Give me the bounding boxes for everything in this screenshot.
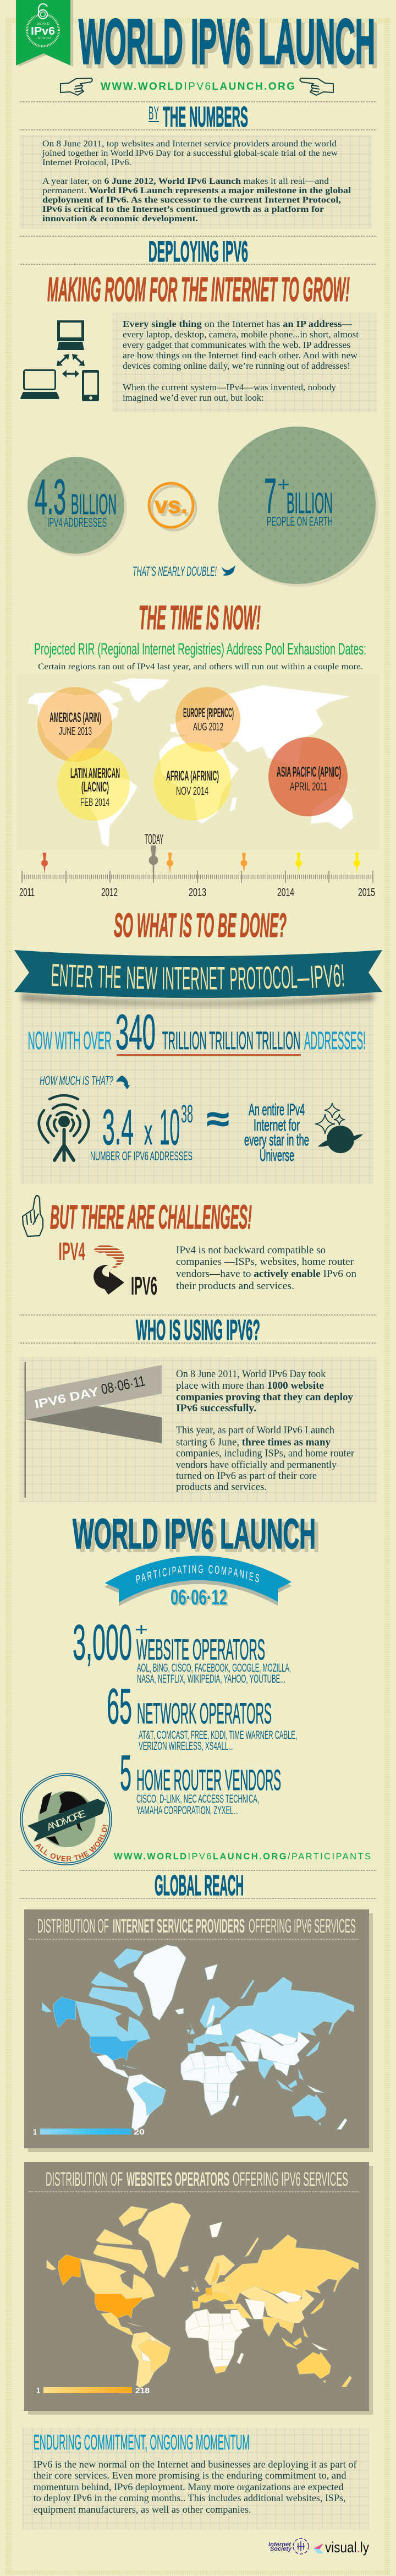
comparison text: Internet for	[254, 1116, 300, 1134]
logo: internet society	[268, 2539, 309, 2554]
comparison text: An entire IPv4	[249, 1101, 305, 1119]
ribbon logo: LAUNCH	[36, 37, 51, 40]
legend: isps: 20	[134, 2127, 145, 2137]
panel: every single thing: every laptop, desktop, camera, mobile phone...in short, almost	[123, 329, 359, 340]
stat: 3.4 x 10^38	[90, 1100, 193, 1163]
choropleth map: isps	[42, 1945, 354, 2130]
text: 2011 and 2012	[176, 1369, 354, 1493]
region: africa: NOV 2014	[176, 785, 208, 798]
panel: every single thing: imagined we’d ever run out, but look:	[123, 392, 264, 403]
region: americas: JUNE 2013	[59, 725, 92, 738]
icon: hand pointing up	[23, 1196, 43, 1236]
panel: intro text: deployment of IPv6. As the successor to the current Internet Protocol,	[42, 195, 341, 205]
panel: intro text: IPv6 is critical to the Internet’s continued growth as a platform for	[42, 205, 324, 214]
vs badge: vs.	[157, 495, 190, 521]
circle: 7 billion people	[218, 427, 378, 587]
badge: and more all over the world: ALL OVER THE WORLD!	[35, 1825, 108, 1862]
text: 2011 and 2012: place with more than 1000 website	[176, 1380, 324, 1391]
region: latin america: FEB 2014	[80, 797, 109, 809]
approximately equal sign: ≈	[207, 1100, 229, 1138]
circle: 4.3 billion ipv4 addresses	[28, 457, 127, 556]
legend: isps	[33, 2127, 145, 2137]
pin: april 2011	[41, 853, 48, 874]
panel: every single thing: devices coming online daily, we’re running out of addresses!	[123, 361, 350, 371]
stat: website operators: +	[135, 1619, 148, 1640]
circle: 7 billion people: PEOPLE ON EARTH	[267, 514, 333, 528]
timeline: 2015	[358, 886, 375, 899]
banner text: INTERNET	[162, 961, 225, 996]
vs badge: vs.	[155, 492, 188, 518]
ribbon: participating companies: PARTICIPATING COMPANIES	[136, 1565, 260, 1584]
icon: left pointing hand	[61, 78, 92, 95]
ribbon logo: IPv6	[31, 25, 55, 37]
pin: nov 2014	[354, 853, 360, 874]
headline: address count	[28, 1005, 366, 1060]
region: africa	[166, 768, 219, 798]
panel: enduring commitment: their core services. Even more promising is the enduring commitment to, and	[34, 2470, 346, 2481]
badge: and more all over the world	[20, 1773, 112, 1865]
text: backward compatibility: vendors—have to actively enable IPv6 on	[176, 1269, 356, 1280]
icon: stars and planet	[315, 1103, 363, 1153]
region: asia pacific: APRIL 2011	[290, 781, 327, 793]
circle: 7 billion people: 7	[264, 469, 277, 524]
legend: websites: 1	[36, 2386, 40, 2395]
infographic page: GLOBAL REACH	[155, 1870, 244, 1902]
timeline	[19, 832, 375, 899]
world map with regional exhaustion dates: AMERICAS (ARIN)	[50, 710, 101, 725]
panel: every single thing: Every single thing on the Internet has an IP address—	[123, 319, 353, 329]
banner text	[50, 957, 346, 997]
panel: intro text: A year later, on 6 June 2012, World IPv6 Launch makes it all real—and	[42, 177, 329, 186]
panel: enduring commitment: equipment manufacturers, as well as other companies.	[34, 2504, 251, 2515]
region: europe: AUG 2012	[193, 721, 223, 733]
region: latin america: (LACNIC)	[81, 779, 109, 795]
region: europe	[183, 706, 234, 733]
world map with regional exhaustion dates: LATIN AMERICAN	[70, 766, 120, 781]
panel: intro text: joined together in World IPv6 Day for a successful global-scale trial of the new	[42, 149, 338, 158]
timeline: 2014	[277, 886, 294, 899]
stat: 3.4 x 10^38: NUMBER OF IPV6 ADDRESSES	[90, 1149, 193, 1163]
panel: intro text: Internet Protocol, IPv6.	[42, 158, 131, 167]
text: backward compatibility: IPv4 is not backward compatible so	[176, 1245, 326, 1256]
comparison text	[244, 1101, 309, 1165]
banner: enter the new internet protocol: IPV6!	[309, 958, 346, 995]
banner: enter the new internet protocol	[14, 950, 382, 1005]
map title: DISTRIBUTION OF	[46, 2169, 123, 2190]
infographic page: DEPLOYING IPV6	[148, 236, 248, 268]
stat: home router vendors: CISCO, D-LINK, NEC ACCESS TECHNICA,	[136, 1793, 259, 1805]
stat: network operators: VERIZON WIRELESS, XS4ALL...	[139, 1740, 234, 1753]
text: 2011 and 2012: vendors have officially and permanently	[176, 1460, 337, 1471]
flag: ipv6 day: 08·06·11	[100, 1372, 147, 1398]
panel: enduring commitment: IPv6 is the new normal on the Internet and businesses are deploying it as part of	[34, 2459, 357, 2470]
text: backward compatibility	[176, 1245, 356, 1292]
stat: 3.4 x 10^38: 3.4	[102, 1100, 134, 1155]
panel: intro text: innovation & economic development.	[42, 214, 198, 223]
panel: enduring commitment	[22, 2428, 369, 2530]
date: 06-06-12	[170, 1586, 229, 1611]
world map with regional exhaustion dates: EUROPE (RIPENCC)	[183, 706, 234, 721]
text: 2011 and 2012: companies, including ISPs, and home router	[176, 1448, 354, 1459]
vs badge	[149, 483, 196, 530]
panel: who is using ipv6	[19, 1357, 377, 1502]
circle: 4.3 billion ipv4 addresses: IPV4 ADDRESSES	[47, 515, 107, 530]
panel: 340 trillion	[20, 992, 373, 1184]
text: 2011 and 2012: turned on IPv6 as part of their core	[176, 1471, 317, 1482]
region: americas	[50, 710, 101, 738]
pin: today	[148, 845, 158, 879]
flag: ipv6 day	[24, 1362, 162, 1498]
panel: 340 trillion: 38	[181, 1100, 193, 1128]
panel: enduring commitment: momentum behind, IPv6 deployment. Many more organizations are expected	[34, 2481, 344, 2492]
stat: home router vendors: YAMAHA CORPORATION, ZYXEL...	[136, 1804, 239, 1817]
world map with regional exhaustion dates	[16, 674, 380, 850]
ribbon logo	[16, 0, 73, 67]
ribbon: participating companies	[105, 1556, 292, 1606]
icon: right pointing hand	[300, 78, 333, 95]
legend: websites: 218	[135, 2386, 150, 2395]
circle: 7 billion people: BILLION	[287, 487, 333, 520]
icon: connected devices	[20, 320, 99, 401]
circle: 4.3 billion ipv4 addresses: 4.3	[35, 470, 66, 525]
stat: network operators	[107, 1679, 297, 1753]
stat: home router vendors: 5	[120, 1745, 131, 1801]
flag: ipv6 day: IPV6 DAY	[34, 1384, 100, 1411]
subheading: Certain regions ran out of IPv4 last year, and others will run out within a couple more.	[38, 662, 363, 672]
banner text: THE	[97, 959, 122, 995]
headline: address count: 340	[116, 1005, 156, 1060]
heading: by the numbers: BY	[148, 103, 159, 124]
panel: website distribution map	[24, 2162, 373, 2415]
text: 2011 and 2012: products and services.	[176, 1482, 267, 1493]
ribbon logo: WORLD	[37, 23, 50, 26]
panel: every single thing: When the current system—IPv4—was invented, nobody	[123, 382, 337, 392]
panel: intro text	[20, 135, 372, 229]
label: how much is that	[40, 1073, 130, 1089]
circle: 7 billion people: +	[277, 473, 290, 495]
panel: every single thing: are how things on the Internet find each other. And with new	[123, 350, 358, 361]
pin: june 2013	[241, 853, 248, 874]
panel: every single thing: every gadget that communicates with the web. IP addresses	[123, 340, 350, 350]
region: asia pacific	[277, 763, 341, 793]
infographic page: IPV6	[131, 1271, 157, 1300]
badge: and more all over the world: AND MORE	[45, 1808, 87, 1833]
stat: 3.4 x 10^38: 10	[160, 1100, 180, 1155]
label: how much is that: HOW MUCH IS THAT?	[40, 1073, 113, 1088]
panel: intro text: permanent. World IPv6 Launch represents a major milestone in the global	[42, 186, 351, 195]
stat: 3.4 x 10^38: x	[144, 1112, 152, 1152]
headline: address count: NOW WITH OVER	[28, 1027, 112, 1055]
date: 06-06-12: 06·06·12	[170, 1586, 227, 1609]
pin: aug 2012	[167, 853, 173, 874]
infographic page: THE NUMBERS	[163, 101, 248, 133]
text: 2011 and 2012: companies proving that they can deploy	[176, 1392, 354, 1403]
text: 2011 and 2012: starting 6 June, three times as many	[176, 1437, 331, 1448]
heading: by the numbers	[148, 101, 248, 133]
comparison text: Universe	[260, 1147, 294, 1165]
map title: WEBSITES OPERATORS	[127, 2169, 229, 2190]
stat: website operators	[73, 1615, 291, 1685]
participants link: WWW.WORLDIPV6LAUNCH.ORG/PARTICIPANTS	[114, 1852, 371, 1862]
callout: nearly double	[133, 564, 235, 579]
legend: isps: 1	[33, 2127, 37, 2137]
logo: internet society: Society	[270, 2546, 292, 2552]
logo: internet society: Internet	[268, 2541, 292, 2548]
text: backward compatibility: companies —ISPs, websites, home router	[176, 1257, 354, 1268]
stat: home router vendors	[120, 1745, 281, 1817]
comparison text: every star in the	[244, 1131, 309, 1149]
logo: visual.ly: visual.ly	[325, 2539, 369, 2556]
date: 06-06-12: 06·06·12	[172, 1587, 229, 1611]
timeline: 2011	[19, 886, 35, 899]
timeline: TODAY	[145, 832, 163, 847]
circle: 4.3 billion ipv4 addresses: BILLION	[71, 489, 117, 521]
text: 2011 and 2012: IPv6 successfully.	[176, 1403, 256, 1414]
diagram: ipv4 to ipv6	[58, 1237, 157, 1300]
choropleth map: websites	[47, 2203, 359, 2388]
banner text: ENTER	[50, 957, 94, 995]
pin: feb 2014	[295, 853, 302, 874]
text: 2011 and 2012: This year, as part of World IPv6 Launch	[176, 1425, 334, 1436]
website link: WWW.WORLDIPV6LAUNCH.ORG	[101, 81, 295, 92]
text: backward compatibility: their products and services.	[176, 1281, 294, 1292]
panel: isp distribution map	[24, 1909, 373, 2152]
panel: intro text: On 8 June 2011, top websites and Internet service providers around the world	[42, 139, 337, 149]
timeline: 2013	[189, 886, 206, 899]
world map with regional exhaustion dates: AFRICA (AFRINIC)	[166, 768, 219, 784]
map title	[37, 1915, 356, 1937]
diagram: ipv4 to ipv6: IPV4	[58, 1237, 85, 1265]
panel: enduring commitment: to deploy IPv6 in the coming months.. This includes additional websites, ISPs,	[34, 2492, 346, 2503]
text: 2011 and 2012: On 8 June 2011, World IPv6 Day took	[176, 1369, 326, 1380]
region: latin america	[70, 766, 120, 809]
timeline: 2012	[101, 886, 118, 899]
map title: DISTRIBUTION OF	[37, 1915, 109, 1937]
panel: every single thing	[112, 313, 377, 412]
banner text: NEW	[126, 960, 158, 996]
icon: antenna	[39, 1095, 89, 1160]
stat: network operators: 65	[107, 1679, 132, 1734]
callout: nearly double: THAT’S NEARLY DOUBLE!	[133, 564, 217, 579]
legend: websites	[36, 2386, 150, 2395]
stat: website operators: 3,000	[73, 1615, 132, 1671]
